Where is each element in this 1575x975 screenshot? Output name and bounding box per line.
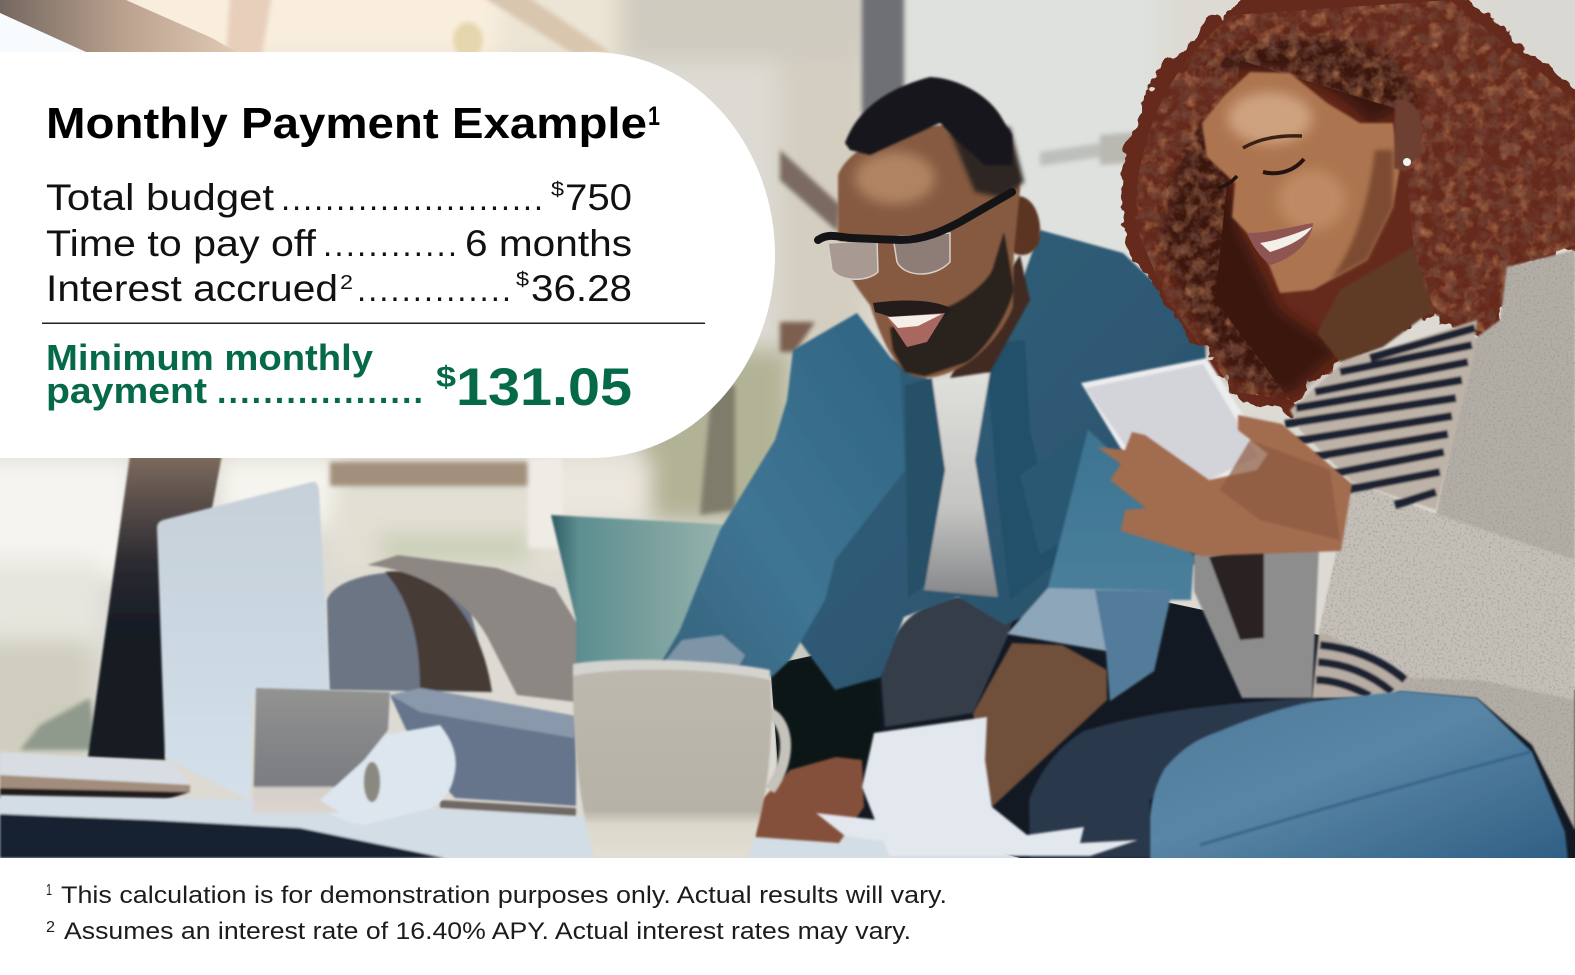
row: interest accrued: 36.28 xyxy=(531,268,632,309)
row: interest accrued: 2 xyxy=(340,272,353,294)
top-left beam xyxy=(0,0,240,54)
receipt roll hole xyxy=(364,762,380,802)
notebook xyxy=(0,752,190,800)
heading: 1 xyxy=(648,101,660,131)
beard xyxy=(890,232,1014,376)
footnote 1: 1 xyxy=(46,882,52,899)
neck xyxy=(950,255,1030,378)
teal cushion xyxy=(551,515,735,670)
left cuff xyxy=(660,635,745,668)
mug: large foreground xyxy=(573,660,786,858)
sofa arm shadow xyxy=(385,571,492,692)
man and woman lap shadow xyxy=(770,590,1575,858)
sofa seat xyxy=(390,688,576,806)
shirt body xyxy=(770,230,1212,690)
minimum monthly payment: .................. xyxy=(217,373,423,411)
footnotes xyxy=(46,882,947,945)
mouth xyxy=(887,313,945,347)
woman: striped top xyxy=(1285,320,1477,698)
minimum monthly payment: 131.05 xyxy=(456,358,632,417)
row: total budget: Total budget xyxy=(46,177,275,218)
cardigan knit texture xyxy=(1319,250,1575,830)
bare wrist shadow xyxy=(1209,545,1264,640)
woman: face and neck xyxy=(1202,72,1433,362)
minimum monthly payment: $ xyxy=(436,361,456,394)
mouth xyxy=(1247,223,1313,265)
minimum monthly payment: payment xyxy=(46,370,207,411)
glasses lenses xyxy=(828,233,950,279)
white tee xyxy=(924,372,998,597)
hair: orange curl texture xyxy=(1135,0,1575,400)
ear xyxy=(1012,196,1040,255)
row: time to pay off: Time to pay off xyxy=(46,223,317,264)
forehead highlight xyxy=(1228,92,1312,144)
heading: Monthly Payment Example xyxy=(46,99,647,148)
jaw shadow xyxy=(1330,150,1393,280)
row: total budget: 750 xyxy=(565,177,632,218)
glasses frame xyxy=(818,192,1012,240)
hair: shadow left xyxy=(1160,110,1340,395)
man: forearm and hand xyxy=(755,643,1107,843)
row: total budget: $ xyxy=(551,179,564,201)
row: total budget xyxy=(46,177,632,218)
dark column xyxy=(88,455,222,760)
cardigan near sleeve xyxy=(1194,541,1319,698)
row: total budget: ........................ xyxy=(281,180,543,217)
row: time to pay off xyxy=(46,223,632,264)
receipt tail xyxy=(816,813,890,842)
woman: jeans xyxy=(1150,691,1568,860)
footnote 2: 2 xyxy=(46,919,55,936)
hair: crown shadow xyxy=(1200,37,1420,125)
white callout panel xyxy=(0,52,775,458)
footnote 1: This calculation is for demonstration purposes only. Actual results will vary. xyxy=(61,882,947,909)
footnote 2: Assumes an interest rate of 16.40% APY. Actual interest rates may vary. xyxy=(64,918,911,945)
woman: hand xyxy=(1097,415,1352,556)
forehead highlight xyxy=(855,152,935,204)
face xyxy=(838,125,1020,378)
moustache xyxy=(873,301,950,318)
throw blanket xyxy=(367,555,576,702)
hair xyxy=(845,77,1012,165)
woman: cardigan xyxy=(1194,250,1575,830)
far eye xyxy=(1218,176,1237,188)
receipt curl xyxy=(862,717,1138,856)
side fade xyxy=(950,127,1024,198)
woman: hair xyxy=(1122,0,1575,412)
cardigan sleeve xyxy=(1319,482,1575,700)
cheek highlight xyxy=(1278,170,1346,230)
sofa arm xyxy=(327,572,492,692)
sofa xyxy=(327,515,735,806)
man: trousers xyxy=(774,596,1320,858)
minimum monthly payment xyxy=(46,337,632,417)
face xyxy=(1202,72,1400,293)
row: time to pay off: ............ xyxy=(323,226,457,263)
calculator xyxy=(1081,358,1268,494)
row: interest accrued: .............. xyxy=(357,271,511,308)
eye xyxy=(1263,159,1304,173)
ear xyxy=(1394,99,1422,172)
collar shadow xyxy=(905,378,945,598)
receipt roll xyxy=(306,725,456,825)
neck xyxy=(1317,247,1433,362)
earring xyxy=(1403,158,1411,166)
chest pocket xyxy=(1022,466,1055,552)
teeth xyxy=(1260,227,1312,252)
receipts xyxy=(306,717,1138,856)
row: interest accrued xyxy=(46,268,632,309)
mug: small grey xyxy=(253,688,390,813)
table xyxy=(0,795,1140,858)
row: interest accrued: Interest accrued xyxy=(46,268,338,309)
divider rule xyxy=(42,322,705,324)
laptop xyxy=(157,482,330,800)
minimum monthly payment: Minimum monthly xyxy=(46,337,373,378)
hair: dark curl texture xyxy=(1135,0,1575,400)
rolled cuff xyxy=(1006,586,1148,652)
man: head xyxy=(818,77,1040,378)
shirt placket xyxy=(987,341,1036,542)
teeth xyxy=(888,314,942,328)
man: denim shirt xyxy=(660,230,1212,701)
row: interest accrued: $ xyxy=(516,269,529,291)
brow xyxy=(1243,136,1302,148)
left sleeve xyxy=(660,313,905,677)
row: time to pay off: 6 months xyxy=(465,223,632,264)
forearm sleeve xyxy=(1048,430,1194,600)
